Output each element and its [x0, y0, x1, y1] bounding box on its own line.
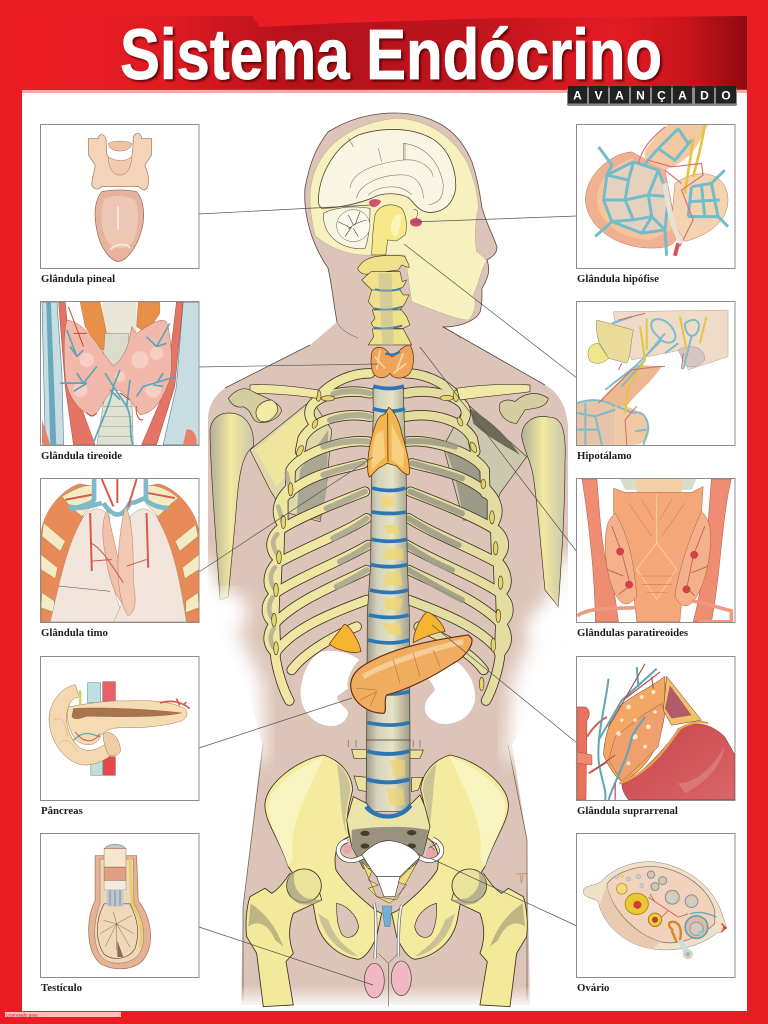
- panel: glândula pineal: [40, 124, 199, 268]
- label: glândulas paratireoides: Glândulas paratireoides: [577, 627, 688, 639]
- panel: glândulas paratireoides: [576, 478, 735, 622]
- icon: right adrenal gland: [413, 612, 445, 643]
- cerebrum: [318, 129, 456, 212]
- ovaries and uterus: [338, 839, 442, 897]
- cerebellum: [323, 207, 370, 249]
- icon: pituitary gland in head: [410, 210, 422, 227]
- licence strip: Licenciado para: [6, 1012, 38, 1018]
- icon: thymus gland: [368, 407, 409, 477]
- spermatic ducts: [374, 903, 402, 958]
- label: hipotálamo: Hipotálamo: [577, 450, 632, 462]
- badge: avançado: A: [615, 88, 624, 102]
- panel: ovário: [576, 834, 735, 978]
- head with brain: [310, 118, 487, 345]
- panel: testículo: [40, 834, 199, 978]
- clavicles and acromions: [228, 384, 548, 423]
- label: glândula pineal: Glândula pineal: [41, 273, 115, 285]
- icon: pineal gland in head: [369, 199, 381, 207]
- brainstem: [372, 205, 406, 255]
- renal vessels: [348, 740, 420, 747]
- label: glândula timo: Glândula timo: [41, 627, 108, 639]
- spinal discs: [367, 386, 409, 725]
- panel: glândula tireoide: [40, 302, 199, 446]
- sacrum: [347, 795, 430, 868]
- face and jaw lines: [337, 322, 460, 338]
- leader lines: [199, 205, 577, 985]
- header band: [22, 16, 747, 93]
- cervical vertebrae: [358, 255, 412, 345]
- label: glândula suprarrenal: Glândula suprarrenal: [577, 805, 678, 817]
- icon: pancreas: [351, 635, 472, 713]
- spine column: [367, 388, 410, 741]
- panel: glândula timo: [40, 478, 199, 622]
- panel: hipotálamo: [576, 302, 735, 446]
- body silhouette: [180, 113, 590, 1009]
- humerus left: [210, 413, 254, 600]
- label: testículo: Testículo: [41, 982, 82, 994]
- label: ovário: Ovário: [577, 982, 609, 994]
- badge: avançado: N: [636, 88, 645, 102]
- label: glândula hipófise: Glândula hipófise: [577, 273, 659, 285]
- label: pâncreas: Pâncreas: [41, 805, 83, 817]
- badge: avançado: O: [721, 88, 731, 102]
- skull area: [310, 118, 487, 320]
- humerus right: [522, 416, 565, 607]
- lumbar processes: [352, 749, 423, 792]
- icon: testes: [364, 961, 411, 998]
- torso skeleton: [210, 345, 565, 741]
- urethra: [382, 906, 392, 927]
- arm bone fades: [200, 592, 576, 648]
- badge: avançado: D: [700, 88, 709, 102]
- panel: glândula hipófise: [576, 124, 735, 268]
- badge: avançado: Ç: [657, 88, 666, 102]
- signature mark: [516, 873, 527, 883]
- badge: avançado: A: [573, 88, 582, 102]
- hip bones and femurs: [246, 755, 527, 1007]
- scapulas: [250, 400, 332, 522]
- panel: pâncreas: [40, 656, 199, 800]
- title: Sistema Endócrino: [120, 16, 662, 95]
- pelvis and legs: [246, 740, 527, 1007]
- badge: avançado: A: [678, 88, 687, 102]
- badge: avançado: V: [594, 88, 603, 102]
- icon: left adrenal gland: [329, 624, 361, 652]
- ribs: [267, 373, 508, 701]
- coccyx: [362, 862, 417, 903]
- icon: thyroid gland: [371, 345, 414, 378]
- panel: glândula suprarrenal: [576, 656, 735, 800]
- label: glândula tireoide: Glândula tireoide: [41, 450, 122, 462]
- rib cartilage tags: [272, 390, 503, 691]
- badge: avançado: [567, 86, 737, 106]
- lumbar spine: [366, 740, 410, 812]
- kidneys: [301, 651, 359, 726]
- licence strip: [5, 1012, 121, 1018]
